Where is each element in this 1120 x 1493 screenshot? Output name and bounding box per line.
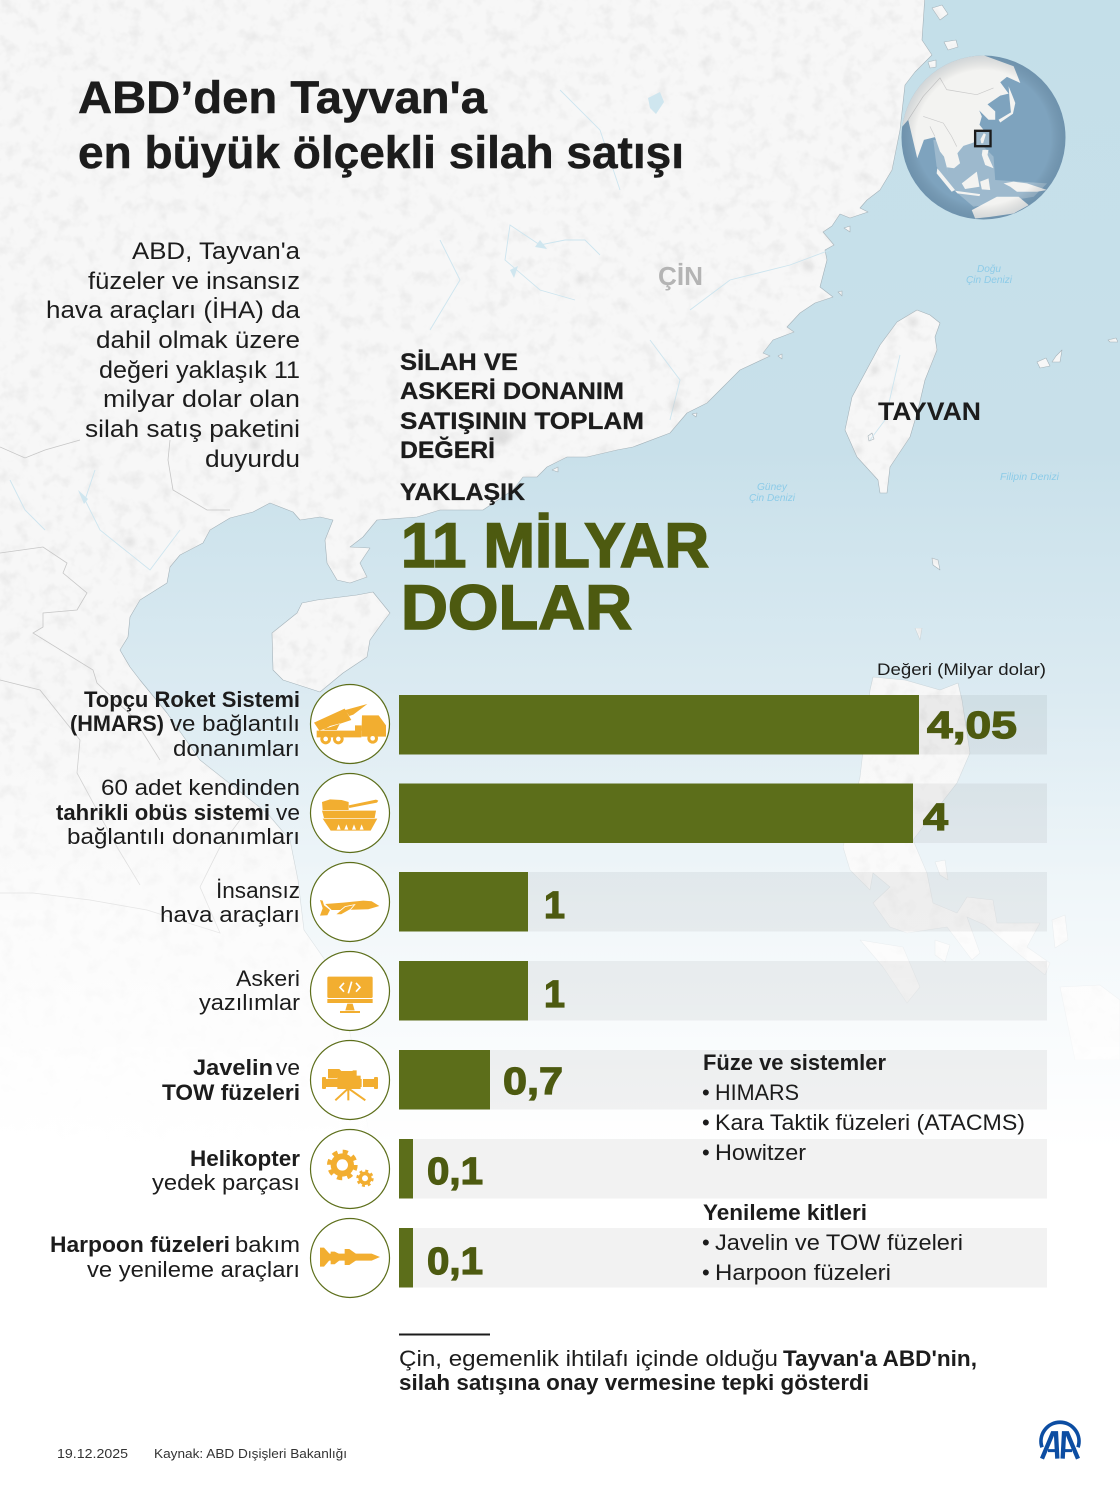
intro paragraph: hava araçları (İHA) da: [46, 297, 301, 324]
note: Çin, egemenlik ihtilafı içinde olduğu: [399, 1346, 778, 1371]
headline total: SATIŞININ TOPLAM: [400, 408, 644, 435]
row: military software: [199, 952, 1047, 1030]
headline total: [400, 349, 709, 643]
icon: rocket launcher: [310, 684, 390, 764]
list: missiles and systems: [702, 1050, 1025, 1165]
logo: AA: [1041, 1422, 1079, 1459]
title: ABD’den Tayvan'a: [78, 72, 488, 123]
headline total: YAKLAŞIK: [400, 479, 526, 506]
row: Javelin and TOW: 0,7: [503, 1061, 563, 1103]
intro paragraph: [46, 238, 301, 473]
icon: drone: [310, 862, 390, 942]
row: helicopter spare parts: [152, 1130, 1047, 1208]
map label: East China Sea: Doğu: [977, 263, 1001, 275]
list: refurbishment kits: Yenileme kitleri: [703, 1200, 867, 1225]
label: hava araçları: [160, 902, 300, 927]
list: missiles and systems: •: [702, 1080, 710, 1105]
label: yazılımlar: [199, 990, 300, 1015]
row: Harpoon missiles: 0,1: [427, 1241, 483, 1283]
axis label: Değeri (Milyar dolar): [877, 660, 1046, 679]
label: [199, 966, 300, 1015]
headline total: DOLAR: [401, 573, 632, 643]
row: drones: [160, 862, 1047, 942]
label: [70, 687, 300, 761]
list: missiles and systems: •: [702, 1110, 710, 1135]
intro paragraph: değeri yaklaşık 11: [99, 357, 300, 384]
icon: howitzer: [310, 774, 390, 852]
label: ve: [276, 1055, 300, 1080]
icon: software monitor: [310, 952, 390, 1030]
row: Javelin and TOW: [162, 1040, 1047, 1120]
intro paragraph: dahil olmak üzere: [96, 327, 300, 354]
map label: Taiwan: TAYVAN: [878, 398, 981, 426]
label: ve yenileme araçları: [87, 1257, 300, 1282]
intro paragraph: duyurdu: [205, 446, 300, 473]
label: ve bağlantılı: [170, 711, 300, 736]
headline total: SİLAH VE: [400, 349, 518, 376]
locator globe: [896, 53, 1066, 220]
list: missiles and systems: Füze ve sistemler: [703, 1050, 886, 1075]
list: refurbishment kits: •: [702, 1230, 710, 1255]
note: Tayvan'a ABD'nin,: [783, 1346, 977, 1371]
label: [56, 775, 300, 849]
footer date: 19.12.2025: [57, 1447, 128, 1461]
label: yedek parçası: [152, 1170, 300, 1195]
label: [162, 1055, 300, 1105]
row: drones: 1: [544, 885, 565, 927]
label: Topçu Roket Sistemi: [84, 687, 300, 712]
list: refurbishment kits: [702, 1200, 963, 1285]
map label: South China Sea: [749, 481, 796, 504]
title: en büyük ölçekli silah satışı: [78, 127, 684, 178]
footer source: Kaynak: ABD Dışişleri Bakanlığı: [154, 1447, 347, 1461]
label: Helikopter: [190, 1146, 300, 1171]
map label: South China Sea: Çin Denizi: [749, 492, 796, 504]
intro paragraph: milyar dolar olan: [103, 386, 300, 413]
label: TOW füzeleri: [162, 1080, 300, 1105]
icon: anti-tank launcher: [310, 1040, 390, 1120]
title: [78, 72, 684, 178]
label: ve: [276, 800, 300, 825]
headline total: 11 MİLYAR: [401, 511, 709, 581]
list: missiles and systems: HIMARS: [715, 1080, 799, 1105]
icon: gears: [310, 1130, 390, 1208]
label: (HMARS): [70, 711, 164, 736]
row: HMARS: [70, 684, 1047, 764]
label: Askeri: [236, 966, 300, 991]
label: bağlantılı donanımları: [67, 824, 300, 849]
label: [160, 878, 300, 927]
label: tahrikli obüs sistemi: [56, 800, 270, 825]
row: self-propelled howitzers: 4: [923, 797, 948, 839]
map label: East China Sea: [966, 263, 1013, 286]
row: HMARS: 4,05: [927, 705, 1017, 747]
list: refurbishment kits: Harpoon füzeleri: [715, 1260, 891, 1285]
label: İnsansız: [216, 878, 300, 903]
label: [152, 1146, 300, 1195]
map label: East China Sea: Çin Denizi: [966, 274, 1013, 286]
row: helicopter spare parts: 0,1: [427, 1151, 483, 1193]
icon: missile: [310, 1218, 390, 1298]
headline total: DEĞERİ: [400, 436, 495, 464]
headline total: ASKERİ DONANIM: [400, 378, 624, 405]
label: Javelin: [193, 1055, 273, 1080]
intro paragraph: füzeler ve insansız: [88, 268, 300, 295]
row: military software: 1: [544, 974, 565, 1016]
note: silah satışına onay vermesine tepki gösterdi: [399, 1370, 869, 1395]
label: bakım: [235, 1232, 300, 1257]
map label: China: ÇİN: [658, 261, 703, 291]
label: donanımları: [173, 736, 300, 761]
list: missiles and systems: Kara Taktik füzeleri (ATACMS): [715, 1110, 1025, 1135]
label: [50, 1232, 300, 1282]
row: self-propelled howitzers: [56, 774, 1047, 852]
intro paragraph: ABD, Tayvan'a: [132, 238, 301, 265]
map label: Philippine Sea: Filipin Denizi: [1000, 471, 1060, 483]
map label: South China Sea: Güney: [757, 481, 788, 493]
row: Harpoon missiles: [50, 1218, 1047, 1298]
label: Harpoon füzeleri: [50, 1232, 230, 1257]
note: [399, 1334, 977, 1395]
list: missiles and systems: •: [702, 1140, 710, 1165]
label: 60 adet kendinden: [101, 775, 300, 800]
intro paragraph: silah satış paketini: [85, 416, 300, 443]
list: refurbishment kits: •: [702, 1260, 710, 1285]
list: refurbishment kits: Javelin ve TOW füzeleri: [715, 1230, 963, 1255]
list: missiles and systems: Howitzer: [715, 1140, 806, 1165]
